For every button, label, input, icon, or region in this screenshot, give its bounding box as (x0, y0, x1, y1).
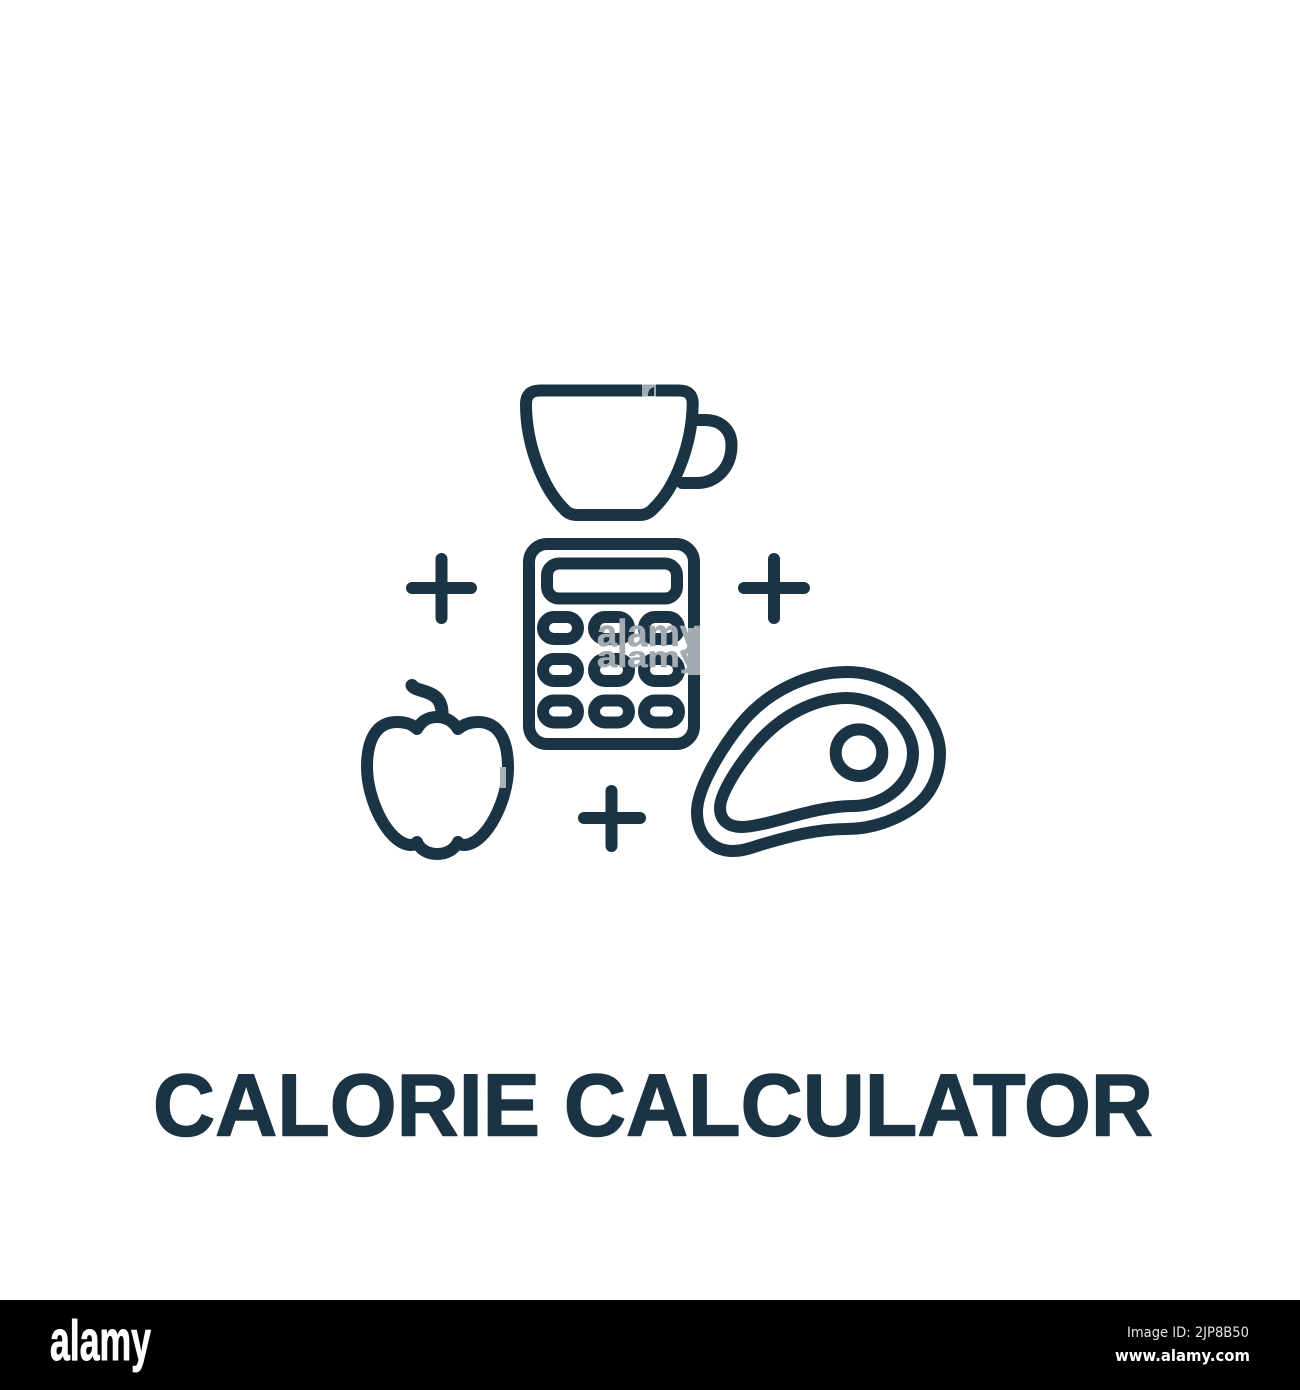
watermark: fragment on cup rim (642, 384, 656, 396)
footer image id: Image ID: 2JP8B50 (1127, 1325, 1249, 1341)
watermark: alamy over calculator: alamy (597, 641, 700, 674)
watermark: alamy over calculator (597, 613, 700, 675)
icon: calculator (529, 544, 694, 744)
icon: plus bottom (584, 791, 640, 846)
icon: coffee cup (526, 390, 732, 515)
footer bar (0, 1300, 1300, 1390)
icon: bell pepper (367, 686, 508, 854)
footer logo: alamy: alamy (50, 1309, 151, 1373)
footer website: www.alamy.com (1115, 1346, 1250, 1365)
icon: plus left (412, 559, 471, 618)
icon: calorie calculator group (367, 390, 940, 854)
watermark: fragment on pepper (500, 767, 506, 788)
icon: steak (697, 672, 940, 851)
icon: plus right (744, 559, 804, 618)
watermark: alamy over calculator: alamy (597, 613, 700, 655)
title: CALORIE CALCULATOR (153, 1056, 1153, 1154)
